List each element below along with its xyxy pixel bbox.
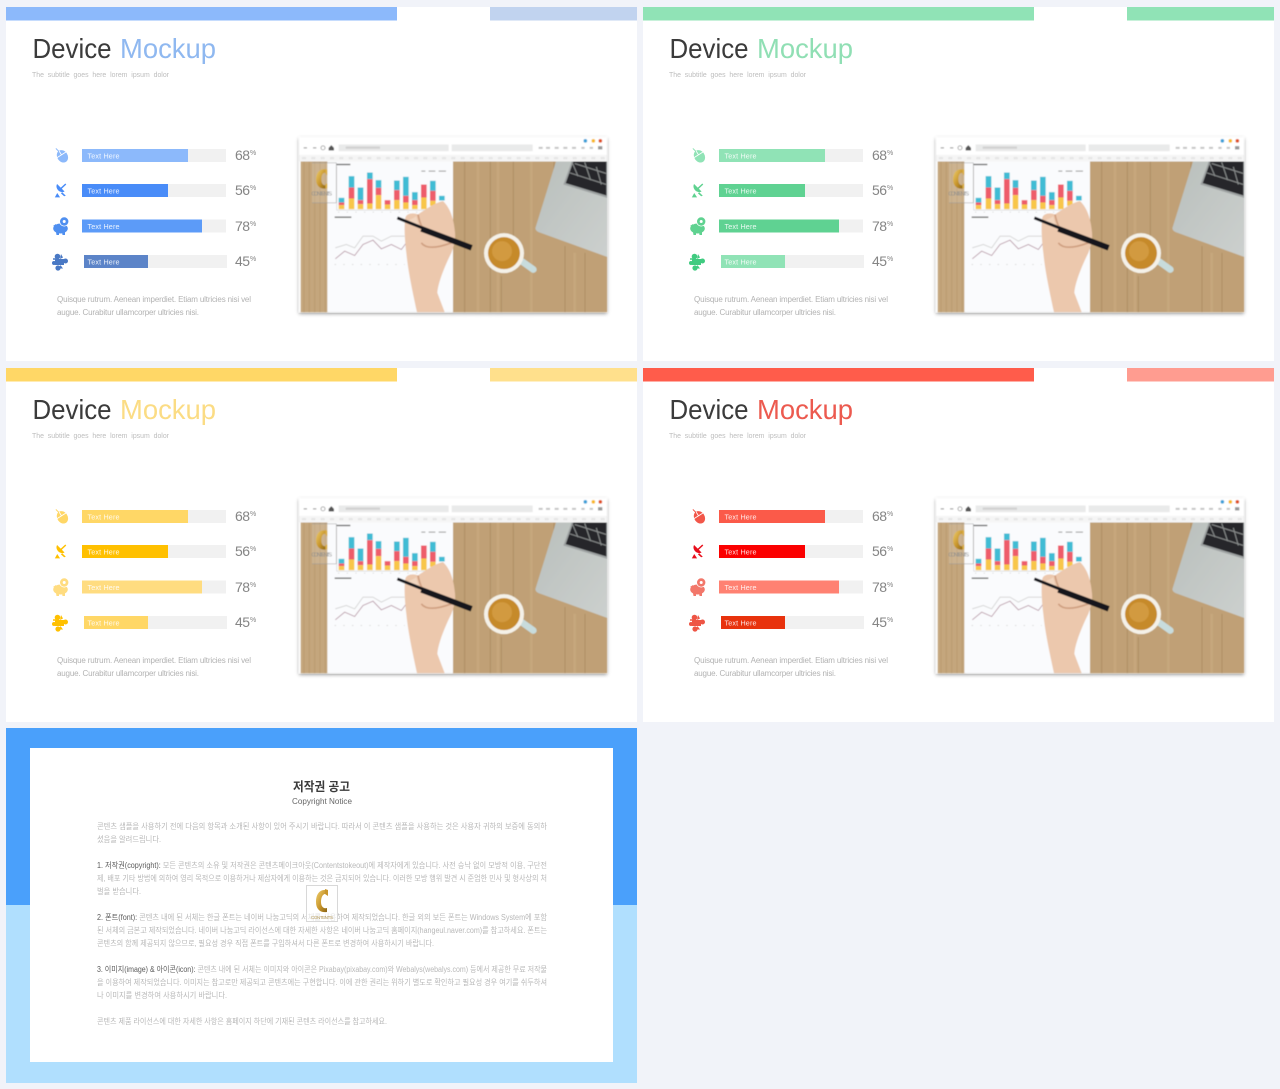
row 45%: 45 [235, 614, 250, 630]
row 68% [692, 147, 893, 165]
row 78%: % [250, 582, 256, 589]
row 68% [55, 508, 256, 526]
row 68%: % [250, 511, 256, 518]
top accent bars [643, 368, 1274, 382]
row 45% [52, 614, 256, 632]
row 68%: % [887, 150, 893, 157]
row 56%: % [250, 546, 256, 553]
title [670, 394, 853, 425]
title: Mockup [120, 394, 216, 425]
panel: yellow device mockup [6, 368, 637, 722]
body text: Quisque rutrum. Aenean imperdiet. Etiam ultricies nisi vel [694, 295, 888, 304]
top accent bars [6, 7, 637, 20]
row 68%: 68 [872, 508, 887, 524]
row 68% [55, 147, 256, 165]
title [670, 33, 853, 64]
row 78%: Text Here [724, 222, 756, 231]
subtitle: The subtitle goes here lorem ipsum dolor [32, 70, 170, 79]
progress rows [52, 147, 256, 271]
row 78%: % [887, 221, 893, 228]
row 56% [55, 543, 256, 559]
progress rows [689, 147, 893, 271]
subtitle: The subtitle goes here lorem ipsum dolor [669, 70, 807, 79]
body text [57, 295, 251, 317]
row 68%: 68 [872, 147, 887, 163]
subtitle: The subtitle goes here lorem ipsum dolor [32, 431, 170, 440]
row 68%: Text Here [724, 512, 756, 522]
body text [57, 656, 251, 678]
body text: Quisque rutrum. Aenean imperdiet. Etiam ultricies nisi vel [57, 656, 251, 665]
title [32, 394, 216, 425]
title: Device [32, 394, 112, 425]
row 56% [692, 543, 893, 559]
watermark logo: CONTENTS [311, 915, 333, 920]
section 1 [97, 860, 547, 896]
browser mockup photo [299, 498, 607, 673]
row 68%: % [887, 511, 893, 518]
intro paragraph: 셨음을 알려드립니다. [97, 834, 161, 844]
row 56%: 56 [872, 182, 887, 198]
body text: augue. Curabitur ullamcorper ultricies nisi. [694, 308, 836, 317]
row 78% [690, 578, 893, 596]
row 45% [52, 253, 256, 271]
row 56%: 56 [872, 543, 887, 559]
intro paragraph [97, 821, 548, 844]
subtitle: The subtitle goes here lorem ipsum dolor [669, 431, 807, 440]
row 56%: % [250, 185, 256, 192]
row 56%: % [887, 185, 893, 192]
watermark logo [306, 886, 338, 922]
row 78%: % [250, 221, 256, 228]
section 1: 제, 배포 기타 방법에 의하여 영리 목적으로 이용하거나 제삼자에게 이용하는 것은 금지되어 있습니다. 이러한 모방 행위 발견 시 준엄한 민사 및 형사상의 처 [97, 873, 547, 883]
title: Device [32, 33, 112, 64]
panel: red device mockup [643, 368, 1274, 722]
row 78%: % [887, 582, 893, 589]
row 78%: 78 [872, 218, 887, 234]
section 3: 을 이용하여 제작되었습니다. 이미지는 참고로만 제공되고 콘텐츠에는 구현합니다. 이에 관한 권리는 위하기 별도로 확인하고 필요성 경우 여기를 쉬두하셔 [97, 977, 547, 987]
row 56%: % [887, 546, 893, 553]
panel: green device mockup [643, 7, 1274, 361]
copyright subheading: Copyright Notice [292, 796, 352, 806]
row 45%: Text Here [88, 618, 120, 628]
body text: Quisque rutrum. Aenean imperdiet. Etiam ultricies nisi vel [57, 295, 251, 304]
section 2: 콘텐츠의 함께 제공되지 않으므로, 필요성 경우 직접 폰트를 구입하셔서 다른 폰트로 변경하여 사용하시기 바랍니다. [97, 938, 434, 948]
top accent bars [643, 7, 1274, 20]
row 45% [689, 614, 893, 632]
row 45% [689, 253, 893, 271]
row 56%: 56 [235, 543, 250, 559]
body text [694, 295, 888, 317]
body text: augue. Curabitur ullamcorper ultricies nisi. [57, 308, 199, 317]
row 68%: 68 [235, 147, 250, 163]
row 45%: Text Here [724, 618, 756, 628]
section 1: 1. 저작권(copyright): 모든 콘텐츠의 소유 및 저작권은 콘텐츠메이크아웃(Contentstokeout)에 제작자에게 있습니다. 사전 승낙 없이 모방적 이용, 구단전 [97, 860, 547, 870]
row 78% [53, 217, 256, 235]
row 68%: 68 [235, 508, 250, 524]
browser mockup photo [936, 137, 1244, 312]
panel: copyright notice [6, 728, 637, 1083]
row 56% [55, 182, 256, 198]
title: Mockup [120, 33, 216, 64]
progress rows [689, 508, 893, 632]
row 78%: 78 [872, 579, 887, 595]
progress rows [52, 508, 256, 632]
body text: augue. Curabitur ullamcorper ultricies nisi. [694, 669, 836, 678]
browser mockup photo [936, 498, 1244, 673]
body text: Quisque rutrum. Aenean imperdiet. Etiam ultricies nisi vel [694, 656, 888, 665]
row 56%: 56 [235, 182, 250, 198]
row 45%: % [887, 256, 893, 263]
title: Device [670, 394, 748, 425]
row 68% [692, 508, 893, 526]
row 68%: Text Here [88, 512, 120, 522]
section 3: 나 이미지를 변경하여 사용하시기 바랍니다. [97, 990, 227, 1000]
row 45%: 45 [872, 253, 887, 269]
row 56%: Text Here [88, 548, 120, 556]
section 2: 2. 폰트(font): 콘텐츠 내에 된 서체는 한글 폰트는 네이버 나눔고딕의 서체를 사용하여 제작되었습니다. 한글 외의 보든 폰트는 Windows System에 포함 [97, 912, 548, 922]
row 56%: Text Here [724, 548, 756, 556]
row 45%: Text Here [88, 258, 120, 266]
row 45%: % [887, 617, 893, 624]
row 68%: Text Here [724, 152, 756, 160]
title: Device [670, 33, 748, 64]
row 45%: % [250, 256, 256, 263]
section 2: 된 서체의 금본고 제작되었습니다. 네이버 나눔고딕 라이선스에 대한 자세한 사항은 네이버 나눔고딕 홈페이지(hangeul.naver.com)를 참고하세요. 폰트는 [97, 925, 547, 935]
row 78%: Text Here [88, 583, 120, 592]
row 78% [53, 578, 256, 596]
section 3 [97, 964, 547, 1000]
title: Mockup [757, 394, 853, 425]
row 45%: 45 [872, 614, 887, 630]
row 56%: Text Here [88, 186, 120, 196]
body text [694, 656, 888, 678]
title [32, 33, 216, 64]
top accent bars [6, 368, 637, 382]
row 68%: Text Here [88, 152, 120, 160]
copyright heading: 저작권 공고 [293, 779, 350, 794]
section 2 [97, 912, 548, 948]
row 78% [690, 217, 893, 235]
row 78%: 78 [235, 579, 250, 595]
section 3: 3. 이미지(image) & 아이콘(icon): 콘텐츠 내에 된 서체는 이미지와 아이콘은 Pixabay(pixabay.com)와 Webalys(webalys.com) 등에서 제공한 무료 저작물 [97, 964, 547, 974]
row 45%: 45 [235, 253, 250, 269]
row 78%: Text Here [88, 222, 120, 231]
section 1: 벌을 받습니다. [97, 886, 141, 896]
intro paragraph: 콘텐츠 샘플을 사용하기 전에 다음의 항목과 소개된 사항이 있어 주시기 바랍니다. 따라서 이 콘텐츠 샘플을 사용하는 것은 사용자 귀하의 보증에 동의하 [97, 821, 548, 831]
row 78%: 78 [235, 218, 250, 234]
panel: blue device mockup [6, 7, 637, 361]
row 68%: % [250, 150, 256, 157]
row 78%: Text Here [724, 583, 756, 592]
browser mockup photo [299, 137, 607, 312]
closing line: 콘텐츠 제품 라이선스에 대한 자세한 사항은 홈페이지 하단에 기재된 콘텐츠 라이선스를 참고하세요. [97, 1016, 387, 1026]
body text: augue. Curabitur ullamcorper ultricies nisi. [57, 669, 199, 678]
row 56%: Text Here [724, 186, 756, 196]
row 56% [692, 182, 893, 198]
row 45%: Text Here [724, 258, 756, 266]
title: Mockup [757, 33, 853, 64]
row 45%: % [250, 617, 256, 624]
